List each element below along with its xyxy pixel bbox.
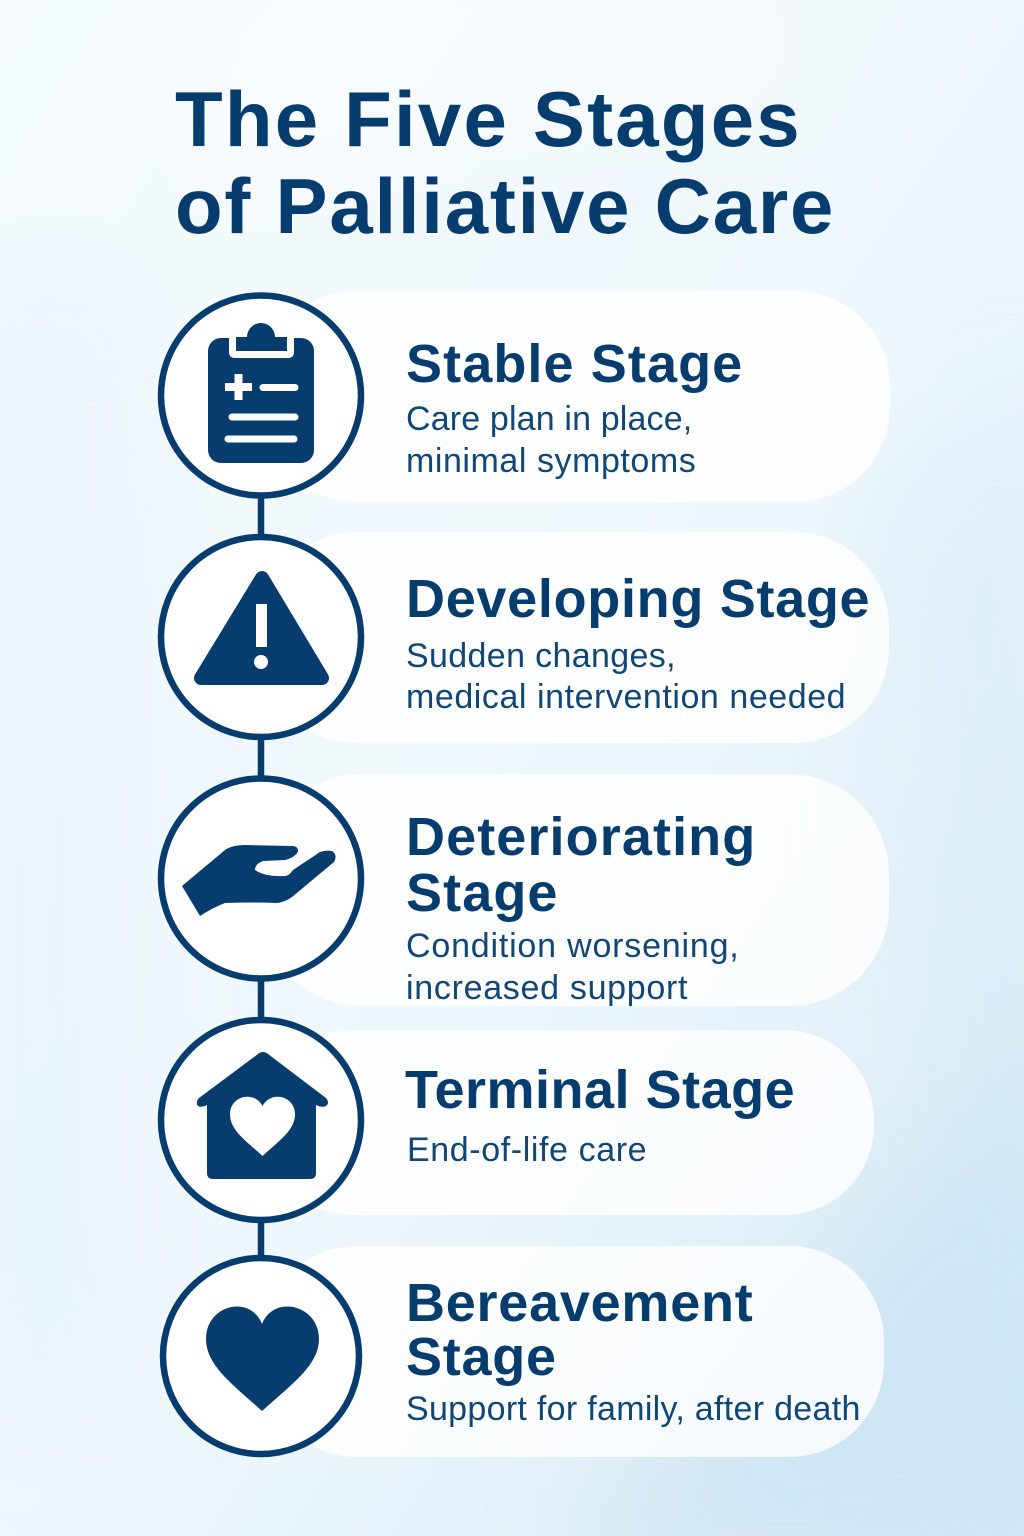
deteriorating stage text: Deteriorating — [406, 807, 756, 867]
icon: warning triangle — [161, 537, 361, 737]
title: The Five Stages — [175, 75, 802, 163]
bereavement stage text: Bereavement — [406, 1273, 753, 1333]
panel: bereavement stage — [262, 1246, 884, 1457]
stable stage text: Care plan in place, — [406, 400, 692, 438]
panel: stable stage — [262, 291, 890, 502]
connector lines — [258, 496, 264, 1260]
icon: clipboard — [161, 296, 361, 496]
terminal stage text — [405, 1060, 795, 1169]
panel: deteriorating stage — [262, 774, 889, 1006]
bereavement stage text: Stage — [406, 1327, 557, 1387]
icon: heart — [163, 1258, 359, 1454]
stable stage text: Stable Stage — [406, 334, 743, 394]
developing stage text: medical intervention needed — [406, 678, 846, 716]
icon: house with heart — [161, 1020, 361, 1220]
title: of Palliative Care — [175, 162, 835, 250]
deteriorating stage text: Stage — [406, 863, 559, 923]
deteriorating stage text — [406, 807, 756, 1007]
deteriorating stage text: increased support — [406, 969, 688, 1007]
deteriorating stage text: Condition worsening, — [406, 927, 740, 965]
panel: terminal stage — [262, 1030, 874, 1215]
terminal stage text: Terminal Stage — [405, 1060, 795, 1120]
stable stage text — [406, 334, 743, 480]
title — [175, 75, 835, 250]
developing stage text — [406, 569, 870, 716]
developing stage text: Sudden changes, — [406, 637, 676, 675]
stable stage text: minimal symptoms — [406, 442, 696, 480]
panel: developing stage — [262, 532, 889, 743]
bereavement stage text — [406, 1273, 861, 1428]
developing stage text: Developing Stage — [406, 569, 870, 629]
icon: open hand — [161, 778, 361, 978]
bereavement stage text: Support for family, after death — [406, 1390, 861, 1428]
terminal stage text: End-of-life care — [407, 1131, 647, 1169]
